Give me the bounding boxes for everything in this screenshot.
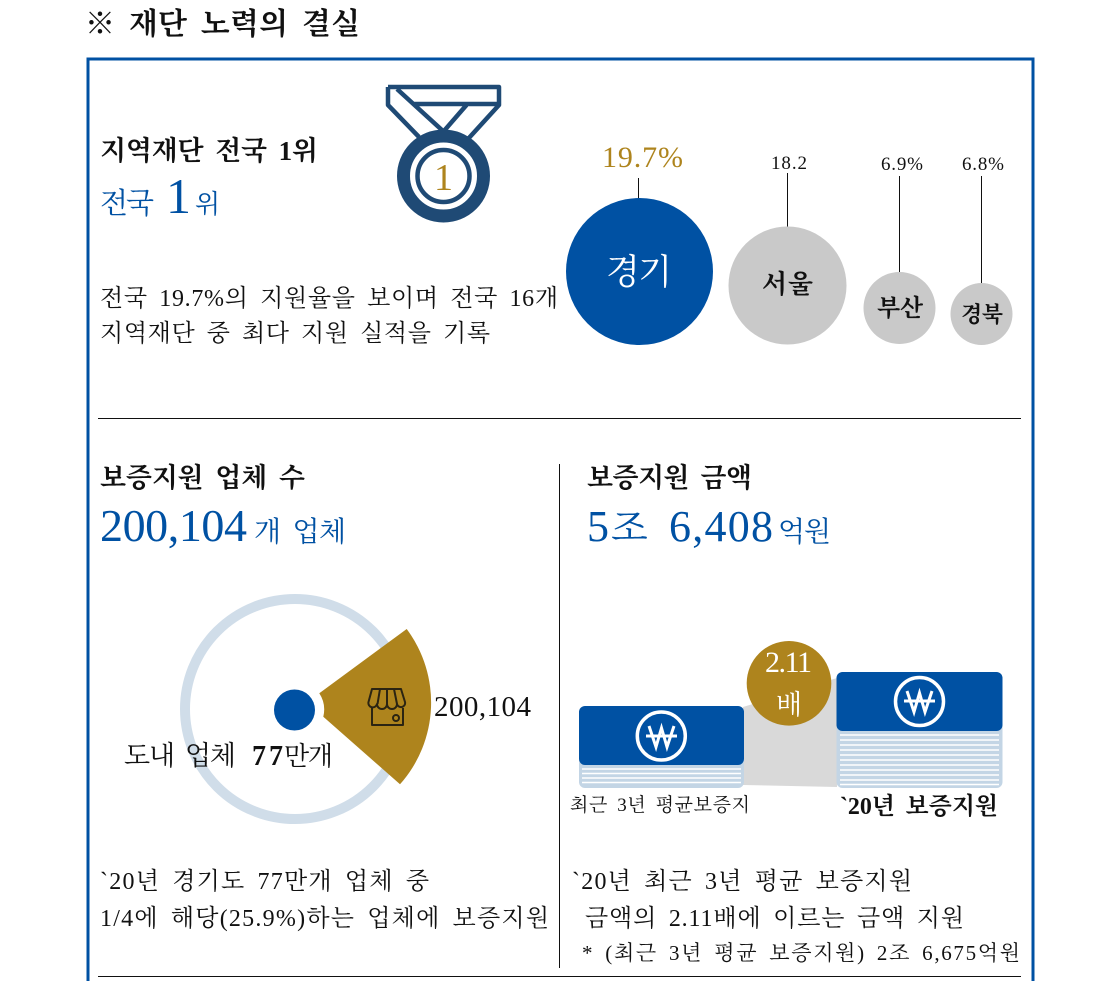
bubble: Seoul bbox=[728, 153, 846, 344]
bubble: Gyeongbuk bbox=[950, 154, 1012, 345]
big figure: first nationwide: 전국 bbox=[100, 187, 154, 220]
text block: regional description: 지역재단 중 최다 지원 실적을 기록 bbox=[100, 320, 490, 347]
label: province companies bbox=[124, 741, 333, 772]
bubble: Busan bbox=[864, 154, 936, 344]
label: supported count: 200,104 bbox=[434, 691, 532, 723]
label: province companies: 만개 bbox=[284, 742, 333, 771]
big figure: amount bbox=[587, 502, 831, 551]
chart: money stacks bbox=[570, 641, 1002, 820]
icon: medal bbox=[388, 87, 499, 216]
label: province companies: 77 bbox=[252, 741, 283, 772]
label: 3-year average: 최근 3년 평균보증지 bbox=[570, 793, 750, 816]
big figure: companies: 개 업체 bbox=[254, 516, 346, 548]
big figure: first nationwide bbox=[100, 168, 220, 224]
callout: multiple bbox=[747, 641, 831, 726]
bubble: Seoul: 서울 bbox=[762, 270, 813, 299]
label: 2020 guarantee: `20년 보증지원 bbox=[840, 793, 998, 820]
text block: amount description: 금액의 2.11배에 이르는 금액 지원 bbox=[585, 905, 964, 932]
icon: small money stack bbox=[579, 706, 744, 788]
big figure: first nationwide: 1 bbox=[166, 168, 191, 224]
big figure: companies: 200,104 bbox=[100, 500, 247, 551]
bubble: Gyeonggi: 경기 bbox=[606, 253, 672, 292]
callout: multiple: 배 bbox=[776, 690, 802, 720]
big figure: amount: 6,408 bbox=[669, 502, 773, 551]
panel: supported companies bbox=[100, 463, 549, 932]
icon: large money stack bbox=[836, 672, 1002, 788]
callout: multiple: 2.11 bbox=[765, 646, 812, 679]
bubble: Busan: 6.9% bbox=[881, 154, 923, 175]
icon: medal: 1 bbox=[434, 157, 453, 199]
big figure: amount: 억원 bbox=[778, 516, 831, 548]
text block: amount description: * (최근 3년 평균 보증지원) 2조 6,675억원 bbox=[582, 941, 1020, 965]
heading: regional ranking: 지역재단 전국 1위 bbox=[100, 136, 318, 166]
bubble: Gyeonggi: 19.7% bbox=[602, 141, 683, 174]
text block: amount description bbox=[572, 868, 1020, 965]
text block: amount description: `20년 최근 3년 평균 보증지원 bbox=[572, 868, 912, 895]
icon: store bbox=[368, 689, 405, 725]
panel: guarantee amount bbox=[570, 463, 1020, 965]
bubble: Gyeongbuk: 6.8% bbox=[962, 154, 1004, 175]
text block: regional description bbox=[100, 285, 558, 347]
bubble: Gyeongbuk: 경북 bbox=[961, 302, 1003, 327]
text block: regional description: 전국 19.7%의 지원율을 보이며 전국 16개 bbox=[100, 285, 558, 312]
heading: supported companies: 보증지원 업체 수 bbox=[100, 463, 305, 493]
big figure: companies bbox=[100, 500, 346, 551]
text block: companies description: 1/4에 해당(25.9%)하는 업체에 보증지원 bbox=[100, 905, 549, 932]
big figure: amount: 조 bbox=[611, 508, 648, 550]
bubble chart bbox=[566, 141, 1012, 345]
heading: guarantee amount: 보증지원 금액 bbox=[587, 463, 752, 493]
big figure: amount: 5 bbox=[587, 502, 609, 551]
bubble: Seoul: 18.2 bbox=[771, 153, 807, 174]
text block: companies description: `20년 경기도 77만개 업체 중 bbox=[100, 868, 429, 895]
chart: share of companies bbox=[124, 599, 532, 819]
panel: regional ranking bbox=[100, 87, 1012, 347]
title: ※ 재단 노력의 결실 bbox=[85, 8, 360, 41]
text block: companies description bbox=[100, 868, 549, 932]
bubble: Gyeonggi bbox=[566, 141, 713, 345]
bubble: Busan: 부산 bbox=[877, 295, 924, 322]
label: province companies: 도내 업체 bbox=[124, 741, 236, 771]
big figure: first nationwide: 위 bbox=[195, 190, 220, 219]
